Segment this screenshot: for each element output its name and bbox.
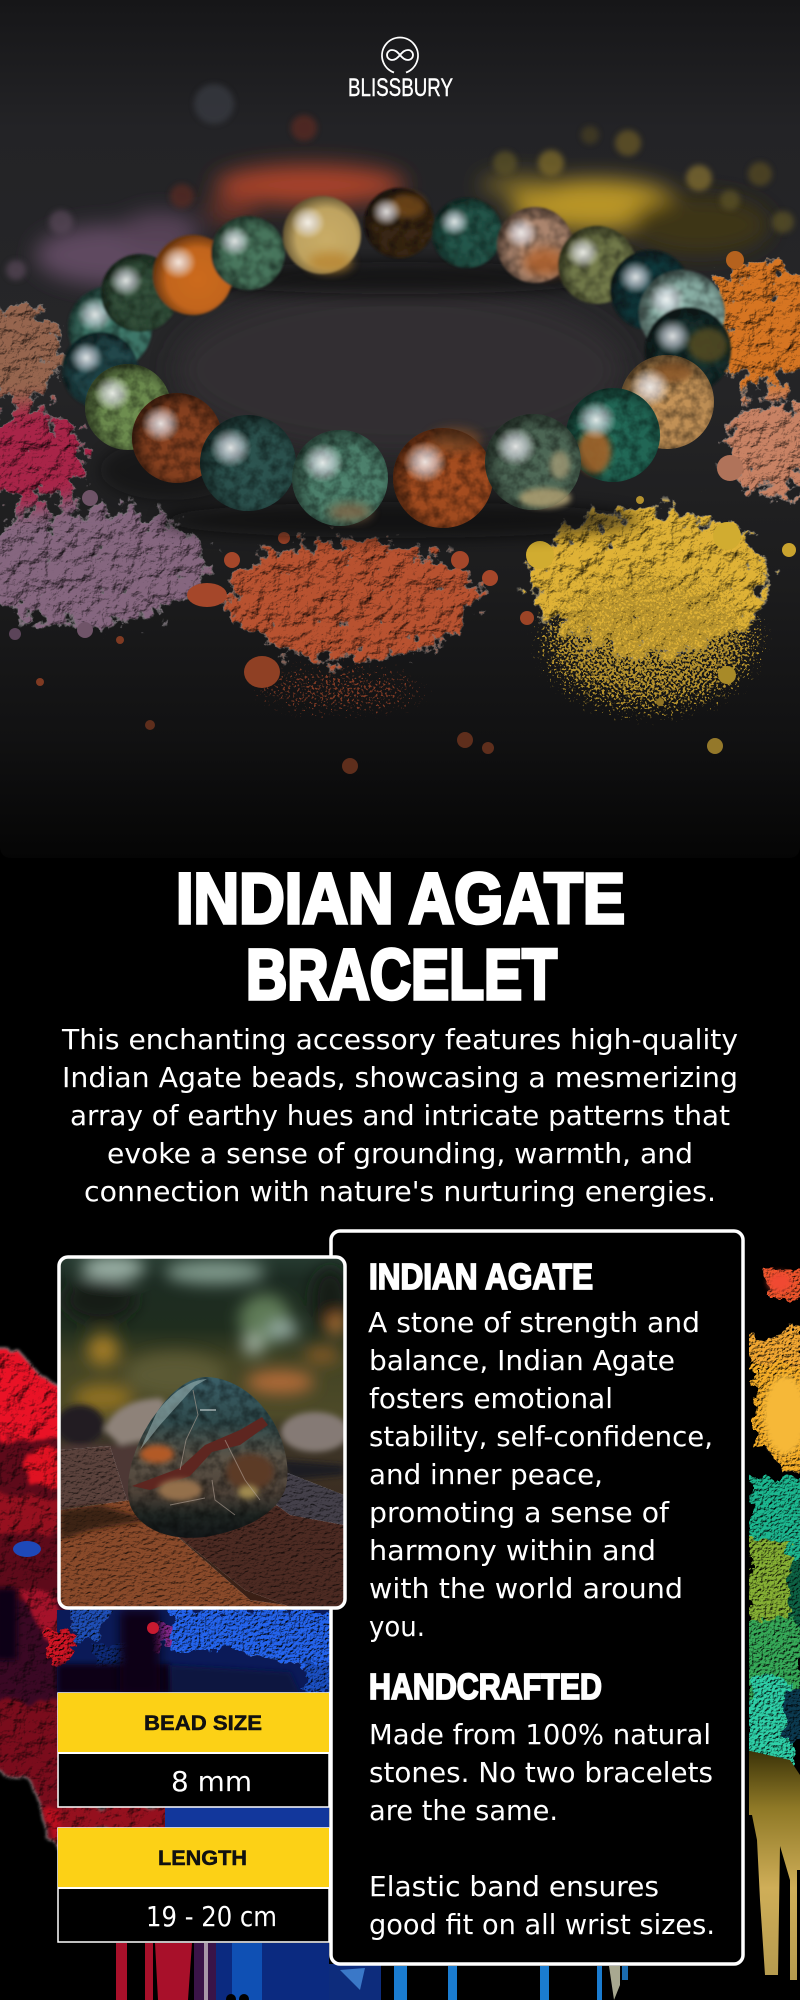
description (61, 1023, 738, 1208)
heading: Indian Agate: INDIAN AGATE (369, 1256, 593, 1297)
stone (128, 1377, 288, 1538)
text block: stone meaning: you. (369, 1610, 425, 1643)
spec: bead size: 8 mm (171, 1765, 252, 1798)
spec: bead size (58, 1693, 329, 1807)
background art: right paint splash (744, 1260, 800, 1980)
text block: stone meaning: and inner peace, (369, 1458, 603, 1491)
ring interior (175, 285, 625, 455)
text block: stone meaning (368, 1306, 713, 1643)
title: INDIAN AGATE (176, 860, 625, 939)
beads: front of bracelet (85, 355, 714, 528)
description: This enchanting accessory features high-quality (61, 1023, 738, 1056)
bokeh dots (6, 84, 794, 280)
back powders, out of focus (35, 165, 770, 285)
description: connection with nature's nurturing energies. (84, 1175, 716, 1208)
panel: stone text (331, 1231, 743, 1964)
beads: back of bracelet (62, 188, 731, 408)
brand name: BLISSBURY (348, 74, 453, 102)
text block: handcrafted details: stones. No two bracelets (369, 1756, 713, 1789)
logo: Blissbury (348, 38, 453, 102)
text block: handcrafted details: Elastic band ensures (369, 1870, 659, 1903)
spec: length: 19 - 20 cm (146, 1900, 277, 1933)
text block: handcrafted details: are the same. (369, 1794, 558, 1827)
text block: handcrafted details: good fit on all wrist sizes. (369, 1908, 715, 1941)
title: BRACELET (246, 936, 557, 1015)
spec: bead size: BEAD SIZE (144, 1712, 262, 1735)
text block: handcrafted details: Made from 100% natural (369, 1718, 711, 1751)
description: Indian Agate beads, showcasing a mesmerizing (62, 1061, 738, 1094)
spec: length: LENGTH (158, 1847, 247, 1870)
paint drips along bottom (116, 1943, 628, 2000)
text block: stone meaning: promoting a sense of (369, 1496, 670, 1529)
hero photo: bracelet on coloured powders (0, 0, 800, 858)
heading: Handcrafted: HANDCRAFTED (369, 1666, 602, 1707)
rocks (56, 1398, 349, 1510)
paint: blue band (48, 1608, 345, 1694)
text block: stone meaning: harmony within and (369, 1534, 656, 1567)
front powders (0, 260, 800, 662)
description: array of earthy hues and intricate patterns that (70, 1099, 730, 1132)
title (176, 860, 625, 1015)
tan paint drips (746, 1750, 800, 1980)
blurred background (64, 1256, 348, 1412)
shadow under bracelet (160, 502, 640, 538)
text block: stone meaning: fosters emotional (369, 1382, 613, 1415)
text block: stone meaning: stability, self-confidence, (369, 1420, 713, 1453)
spec: length (58, 1828, 329, 1942)
text block: stone meaning: with the world around (369, 1572, 683, 1605)
panel: stone photo (56, 1256, 349, 1608)
text block: handcrafted details (369, 1718, 715, 1941)
text block: stone meaning: A stone of strength and (368, 1306, 700, 1339)
powder clumps (9, 251, 796, 774)
scattered powder dust (104, 491, 772, 726)
text block: stone meaning: balance, Indian Agate (369, 1344, 675, 1377)
icon: infinity in circle (382, 38, 418, 72)
background art: left paint splash (0, 1350, 628, 2000)
description: evoke a sense of grounding, warmth, and (107, 1137, 693, 1170)
